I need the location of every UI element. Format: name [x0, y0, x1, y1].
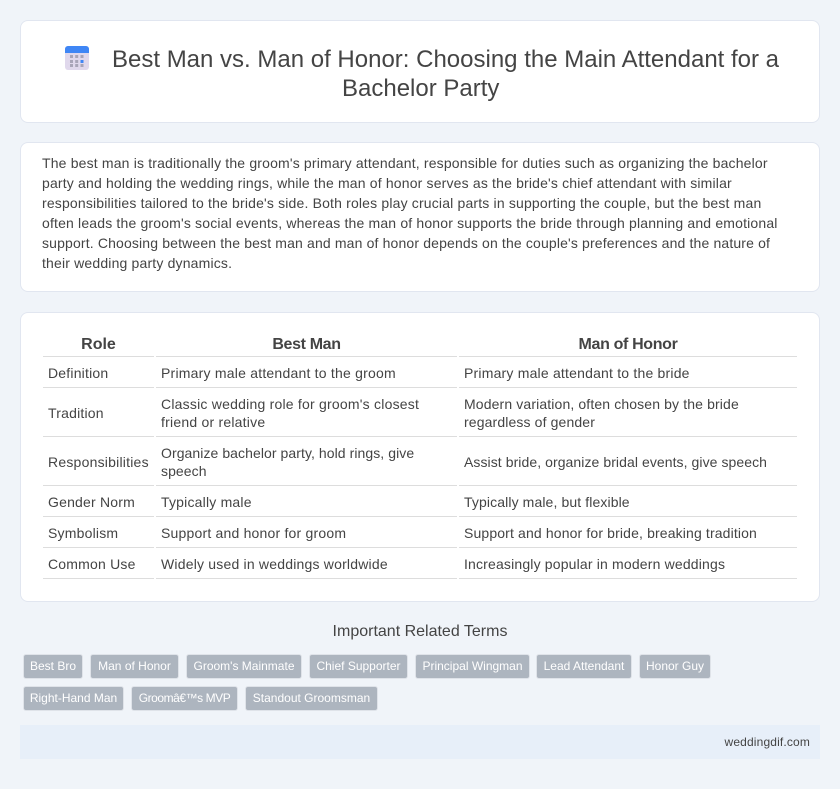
text: Bachelor Party	[342, 75, 499, 102]
row: definition: Definition	[48, 365, 108, 381]
row: responsibilities: speech	[161, 463, 207, 479]
text: Best Man vs. Man of Honor: Choosing the Main Attendant for a	[112, 46, 779, 73]
table header: best man: Best Man	[272, 336, 341, 353]
row: common use: Widely used in weddings worldwide	[161, 556, 388, 572]
tag group: related terms: Man of Honor	[98, 659, 171, 673]
tag group: related terms: Lead Attendant	[544, 659, 624, 673]
tag group: related terms: Principal Wingman	[422, 659, 523, 673]
tag group: related terms: Standout Groomsman	[253, 691, 370, 705]
row: symbolism: Support and honor for groom	[161, 525, 346, 541]
tag group: related terms	[23, 654, 711, 711]
title	[112, 46, 779, 102]
intro text: responsibilities tailored to the bride's side. Both roles play crucial parts in supporting the couple, but the best man	[42, 195, 761, 211]
tag group: related terms: Best Bro	[30, 659, 76, 673]
row: definition: Primary male attendant to the bride	[464, 365, 690, 381]
row: responsibilities: Organize bachelor party, hold rings, give	[161, 445, 414, 461]
intro text	[42, 155, 778, 271]
intro text: The best man is traditionally the groom's primary attendant, responsible for duties such as organizing the bachelor	[42, 155, 768, 171]
row: definition: Primary male attendant to the groom	[161, 365, 396, 381]
icon: calendar	[65, 46, 89, 70]
row: symbolism: Support and honor for bride, breaking tradition	[464, 525, 757, 541]
tag group: related terms: Honor Guy	[646, 659, 704, 673]
row: tradition	[48, 396, 739, 430]
table header: man of honor: Man of Honor	[579, 336, 677, 353]
panel: comparison table	[20, 312, 820, 602]
footer bar	[20, 725, 820, 759]
row: tradition: regardless of gender	[464, 414, 595, 430]
row: common use: Increasingly popular in modern weddings	[464, 556, 725, 572]
intro text: support. Choosing between the best man and man of honor depends on the couple's preferences and the nature of	[42, 235, 770, 251]
row: responsibilities: Responsibilities	[48, 454, 149, 470]
row: common use: Common Use	[48, 556, 136, 572]
footer source text: weddingdif.com	[725, 735, 810, 749]
table header: role: Role	[81, 336, 116, 353]
row: tradition: Tradition	[48, 405, 104, 421]
tag group: related terms: Groomâ€™s MVP	[139, 691, 230, 705]
row: tradition: friend or relative	[161, 414, 265, 430]
intro text: party and holding the wedding rings, while the man of honor serves as the bride's chief attendant with similar	[42, 175, 732, 191]
row: gender norm: Typically male	[161, 494, 252, 510]
row: symbolism	[48, 525, 757, 541]
tag group: related terms: Chief Supporter	[316, 659, 401, 673]
row: symbolism: Symbolism	[48, 525, 118, 541]
row: gender norm: Typically male, but flexible	[464, 494, 630, 510]
heading: important related terms: Important Related Terms	[333, 623, 507, 640]
intro text: often leads the groom's social events, whereas the man of honor supports the bride through planning and emotional	[42, 215, 778, 231]
row: definition	[48, 365, 690, 381]
row: tradition: Classic wedding role for groom's closest	[161, 396, 419, 412]
row: responsibilities: Assist bride, organize bridal events, give speech	[464, 454, 767, 470]
panel: intro paragraph	[20, 142, 820, 292]
tag group: related terms: Groom's Mainmate	[194, 659, 294, 673]
tag group: related terms: Right-Hand Man	[30, 691, 117, 705]
row: common use	[48, 556, 725, 572]
intro text: their wedding party dynamics.	[42, 255, 232, 271]
header panel	[20, 20, 820, 123]
row: gender norm: Gender Norm	[48, 494, 135, 510]
row: tradition: Modern variation, often chosen by the bride	[464, 396, 739, 412]
row: responsibilities	[48, 445, 767, 479]
row: gender norm	[48, 494, 630, 510]
